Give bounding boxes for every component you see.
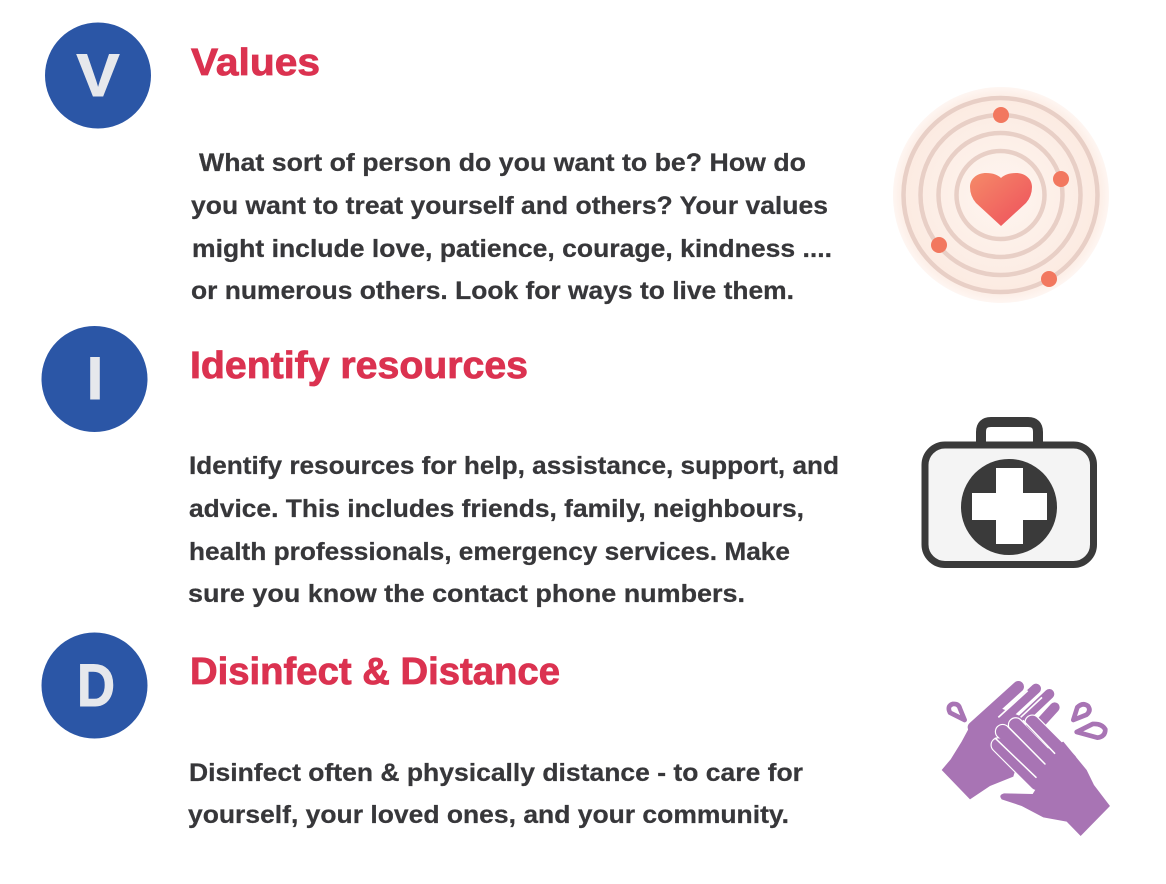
icon: first aid kit (925, 422, 1094, 564)
icon: heart with orbits (893, 87, 1109, 303)
text block: values description: What sort of person do you want to be? How do (199, 149, 806, 177)
text block: resources description (188, 452, 839, 608)
badge: letter I: I (87, 345, 103, 412)
section: Disinfect and Distance (42, 632, 1110, 836)
badge: letter V: V (76, 42, 120, 109)
badge: letter D: D (77, 652, 115, 719)
section: Values (45, 22, 1109, 305)
heading: Identify resources: Identify resources (190, 345, 528, 387)
text block: resources description: advice. This includes friends, family, neighbours, (189, 495, 804, 523)
text block: disinfect description: yourself, your loved ones, and your community. (188, 801, 789, 829)
text block: disinfect description (188, 759, 803, 829)
text block: values description: or numerous others. Look for ways to live them. (191, 277, 794, 305)
heading: Values: Values (191, 42, 320, 84)
text block: resources description: health professionals, emergency services. Make (189, 538, 790, 566)
text block: values description: you want to treat yourself and others? Your values (191, 192, 828, 220)
text block: resources description: sure you know the contact phone numbers. (188, 580, 745, 608)
text block: disinfect description: Disinfect often & physically distance - to care for (189, 759, 803, 787)
section: Identify resources (42, 326, 1094, 608)
text block: resources description: Identify resources for help, assistance, support, and (189, 452, 839, 480)
icon: washing hands (942, 687, 1110, 836)
badge: letter V (45, 22, 151, 128)
badge: letter I (42, 326, 148, 432)
badge: letter D (42, 632, 148, 738)
text block: values description: might include love, patience, courage, kindness .... (192, 235, 832, 263)
text block: values description (191, 149, 832, 305)
heading: Disinfect & Distance: Disinfect & Distance (190, 651, 560, 693)
